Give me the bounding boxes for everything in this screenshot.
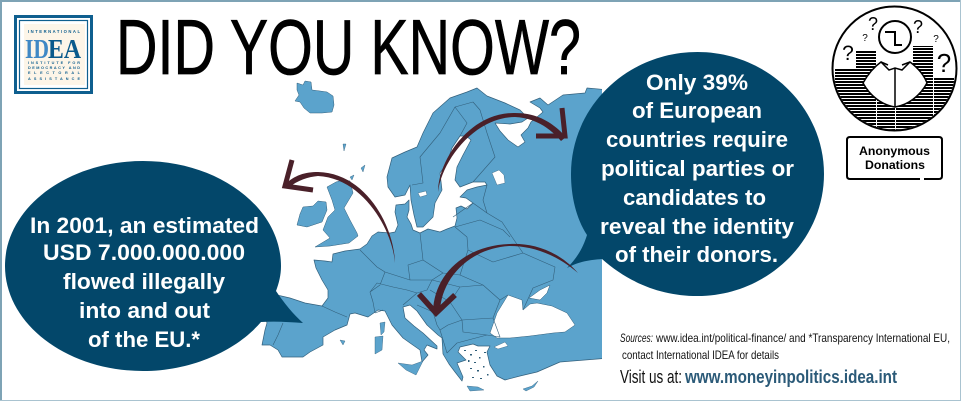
visit us link: www.moneyinpolitics.idea.int [684,367,897,387]
inland waters [418,170,508,349]
visit us link: Visit us at: [620,367,682,387]
Aegean islands [464,350,488,379]
speech bubble: illegal flows [5,161,303,371]
logo: International IDEA: ID [25,34,49,64]
Sea of Azov [529,285,550,300]
arrow: towards the Balkans [419,244,578,313]
sources: contact International IDEA for details [622,348,779,362]
visit us link [620,367,897,387]
sources [620,331,950,362]
bubble text [30,213,259,352]
logo: International IDEA: INTERNATIONAL [28,29,80,34]
bubble text: Only 39% [646,70,748,95]
logo: International IDEA: EA [48,34,81,64]
bubble text: of the EU.* [88,327,200,352]
donor head [879,21,911,53]
bubble text [600,70,795,267]
bubble text: reveal the identity [600,214,795,239]
label: Anonymous Donations: Anonymous [859,144,930,158]
arrow: towards the east [438,108,566,192]
sources: Sources: [620,331,653,345]
question marks: ? [862,33,868,44]
mainland Europe [262,88,610,381]
bubble text: candidates to [623,185,766,210]
map of Europe [262,81,610,391]
question marks: ? [868,14,878,34]
logo: International IDEA: INSTITUTE FOR [28,61,80,65]
coin stacks [835,46,954,134]
Iceland [295,81,334,113]
question marks: ? [913,17,923,37]
Black Sea [490,295,575,338]
label: Anonymous Donations [847,137,942,179]
logo: International IDEA: ELECTORAL [28,71,81,75]
question marks: ? [933,34,939,45]
bubble text: flowed illegally [63,269,226,294]
bubble text: of their donors. [615,242,778,267]
question marks: ? [842,42,854,65]
label: Anonymous Donations: Donations [865,158,925,172]
bubble text: of European [632,98,762,123]
bubble text: into and out [79,298,211,323]
question marks [842,14,951,78]
bubble text: countries require [606,127,788,152]
bubble text: USD 7.000.000.000 [43,240,245,265]
Ireland [297,201,327,227]
country borders [273,102,555,353]
icon: anonymous donor [832,6,956,134]
Mediterranean islands [340,144,538,391]
arrow: towards the west [284,160,395,263]
bubble text: In 2001, an estimated [30,213,259,238]
logo: International IDEA [16,16,92,92]
title: DID YOU KNOW? [116,3,581,91]
donor body [863,62,927,107]
bubble text: political parties or [601,156,794,181]
speech bubble: identity of donors [567,52,824,296]
logo: International IDEA: ASSISTANCE [28,77,80,81]
logo: International IDEA: DEMOCRACY AND [28,66,80,70]
Great Britain [315,180,358,247]
question marks: ? [937,48,951,78]
